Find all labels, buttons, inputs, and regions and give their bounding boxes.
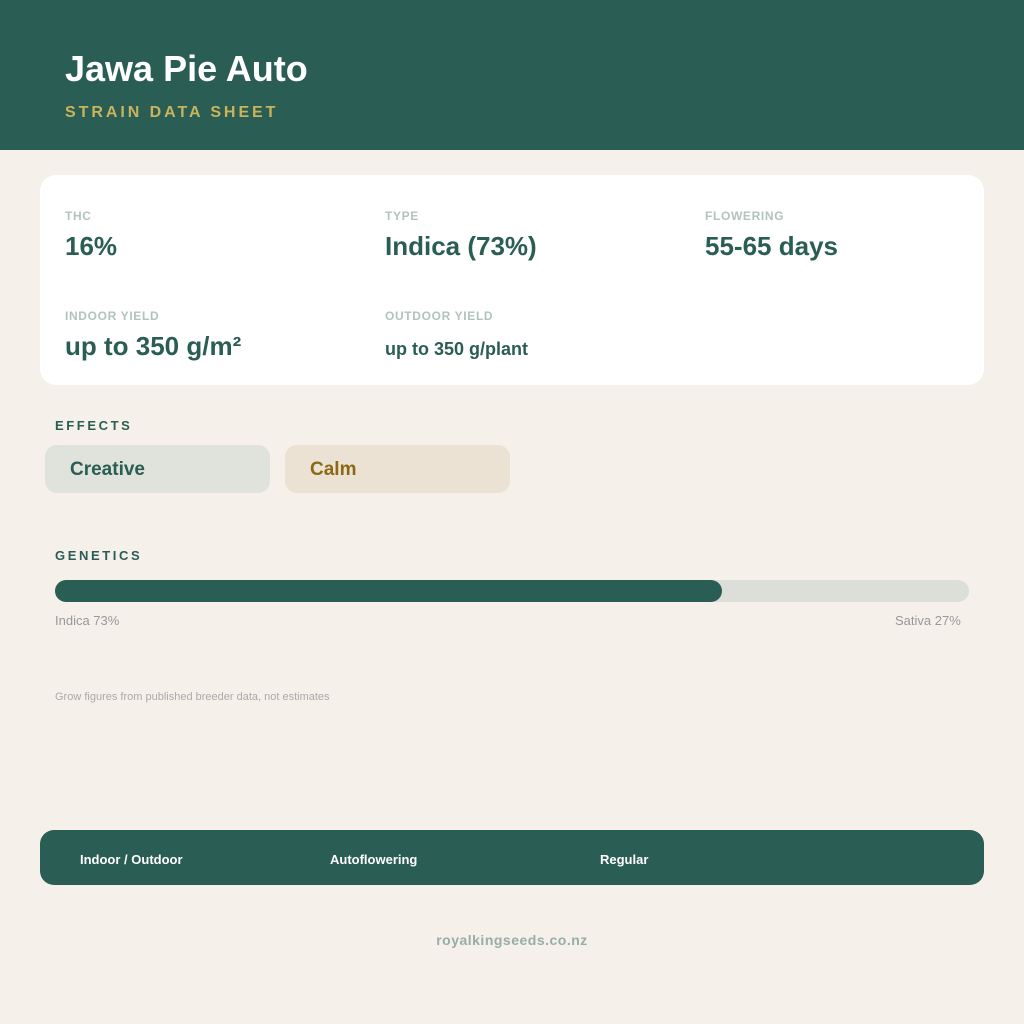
creative text: Creative [70,459,145,480]
panel: stats card [40,175,984,385]
stat: type label: TYPE [385,209,419,223]
stat: flowering value: 55-65 days [705,231,838,261]
label: indica share: Indica 73% [55,613,119,628]
label: sativa share: Sativa 27% [895,613,961,628]
subtitle: STRAIN DATA SHEET [65,104,278,121]
stat: outdoor yield label: OUTDOOR YIELD [385,309,493,323]
stat: type value: Indica (73%) [385,231,537,261]
stat: indoor yield value: up to 350 g/m² [65,331,241,361]
genetics bar [55,580,969,602]
stat: flowering label: FLOWERING [705,209,784,223]
footnote: Grow figures from published breeder data, not estimates [55,691,330,703]
effect pill: creative [45,445,270,493]
heading: effects: EFFECTS [55,418,132,433]
title: Jawa Pie Auto [65,48,308,89]
header band [0,0,1024,150]
tag: seed type: Regular [600,852,648,867]
stat: outdoor yield value: up to 350 g/plant [385,339,528,359]
indica fill [55,580,722,602]
stat: THC label: THC [65,209,92,223]
heading: genetics: GENETICS [55,548,142,563]
tag: environment: Indoor / Outdoor [80,852,183,867]
website: royalkingseeds.co.nz [436,932,588,948]
panel: grow tags [40,830,984,885]
stat: THC value: 16% [65,231,117,261]
effect pill: calm [285,445,510,493]
stat: indoor yield label: INDOOR YIELD [65,309,159,323]
tag: flowering type: Autoflowering [330,852,417,867]
calm text: Calm [310,459,356,480]
